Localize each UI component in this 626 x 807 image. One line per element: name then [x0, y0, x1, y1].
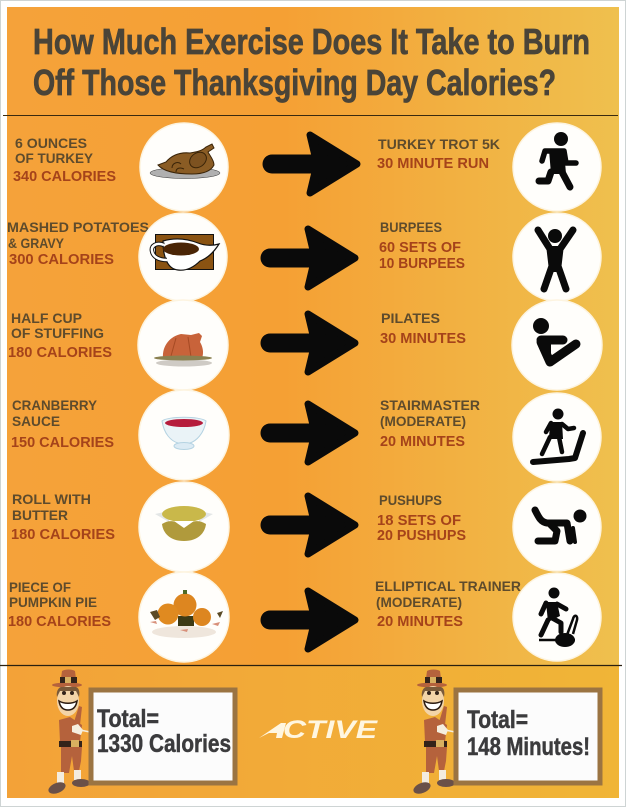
exercise label: elliptical: ELLIPTICAL TRAINER: [375, 578, 521, 594]
icon: stuffed roast: [138, 300, 228, 390]
food label: potatoes: [7, 219, 149, 268]
food label: stuffing: [8, 310, 112, 361]
food label: roll: 180 CALORIES: [11, 527, 115, 543]
exercise label: pilates: [380, 310, 466, 347]
title: [33, 21, 590, 103]
exercise label: turkey trot: TURKEY TROT 5K: [378, 136, 500, 152]
food label: roll: [11, 491, 115, 543]
top divider: [3, 114, 618, 116]
food label: cranberry: [11, 397, 114, 451]
arrow: row 4: [270, 404, 355, 462]
food label: cranberry: 150 CALORIES: [11, 435, 114, 451]
icon: gravy boat: [139, 213, 227, 301]
pilgrim right: [412, 670, 460, 796]
food label: potatoes: & GRAVY: [8, 235, 65, 251]
logo: active: CTIVE: [283, 716, 379, 744]
icon: pumpkins: [139, 572, 229, 662]
exercise label: elliptical: [375, 578, 521, 630]
sign: total minutes: Total=: [467, 706, 528, 734]
exercise label: burpees: 10 BURPEES: [379, 256, 465, 272]
icon: cranberry sauce: [139, 390, 229, 480]
exercise label: burpees: [379, 219, 465, 272]
sign: total calories: 1330 Calories: [97, 730, 231, 758]
icon: burpee figure: [513, 213, 601, 301]
exercise label: stairmaster: STAIRMASTER: [380, 397, 480, 413]
exercise label: elliptical: 20 MINUTES: [377, 614, 463, 630]
icon: stairmaster figure: [513, 393, 601, 481]
exercise label: pushups: [377, 492, 466, 544]
food label: pie: [8, 579, 111, 630]
icon: elliptical figure: [513, 573, 601, 661]
food label: potatoes: MASHED POTATOES: [7, 219, 149, 235]
exercise label: pushups: 20 PUSHUPS: [377, 528, 466, 544]
exercise label: burpees: BURPEES: [380, 219, 442, 235]
exercise label: turkey trot: 30 MINUTE RUN: [377, 156, 489, 172]
pilgrim left: [47, 670, 95, 796]
food label: turkey: [13, 135, 116, 185]
food label: stuffing: HALF CUP: [11, 310, 82, 326]
exercise label: stairmaster: 20 MINUTES: [380, 434, 465, 450]
icon: roll with butter: [139, 482, 229, 572]
food label: roll: BUTTER: [12, 507, 68, 523]
food label: cranberry: CRANBERRY: [12, 397, 98, 413]
sign: total minutes: [456, 690, 600, 783]
exercise label: stairmaster: [380, 397, 480, 450]
exercise label: burpees: 60 SETS OF: [379, 240, 461, 256]
food label: turkey: 340 CALORIES: [13, 169, 116, 185]
arrow: row 1: [272, 135, 357, 193]
bottom divider: [0, 664, 622, 666]
exercise label: pilates: PILATES: [381, 310, 440, 326]
exercise label: turkey trot: [377, 136, 500, 172]
food label: stuffing: OF STUFFING: [11, 325, 104, 341]
arrow: row 5: [270, 496, 355, 554]
footer panel: [7, 665, 619, 798]
icon: runner: [513, 123, 601, 211]
exercise label: elliptical: (MODERATE): [376, 594, 462, 610]
food label: roll: ROLL WITH: [12, 491, 91, 507]
food label: turkey: OF TURKEY: [15, 150, 94, 166]
icon: roast turkey: [140, 123, 228, 211]
exercise label: pushups: 18 SETS OF: [377, 513, 461, 529]
arrow: row 6: [270, 591, 355, 649]
exercise label: pushups: PUSHUPS: [379, 492, 442, 508]
icon: pilates figure: [512, 300, 602, 390]
food label: stuffing: 180 CALORIES: [8, 345, 112, 361]
sign: total minutes: 148 Minutes!: [467, 733, 590, 761]
sign: total calories: Total=: [97, 705, 159, 733]
food label: pie: PIECE OF: [9, 579, 71, 595]
exercise label: stairmaster: (MODERATE): [380, 413, 466, 429]
arrow: row 2: [270, 229, 355, 287]
food label: pie: PUMPKIN PIE: [9, 594, 97, 610]
arrow: row 3: [270, 314, 355, 372]
icon: pushups figure: [513, 483, 601, 571]
background panel: [7, 7, 619, 665]
exercise label: pilates: 30 MINUTES: [380, 331, 466, 347]
food label: turkey: 6 OUNCES: [15, 135, 87, 151]
food label: potatoes: 300 CALORIES: [9, 252, 114, 268]
food label: pie: 180 CALORIES: [8, 614, 111, 630]
sign: total calories: [91, 690, 235, 783]
food label: cranberry: SAUCE: [12, 413, 60, 429]
logo: active: [259, 716, 379, 744]
